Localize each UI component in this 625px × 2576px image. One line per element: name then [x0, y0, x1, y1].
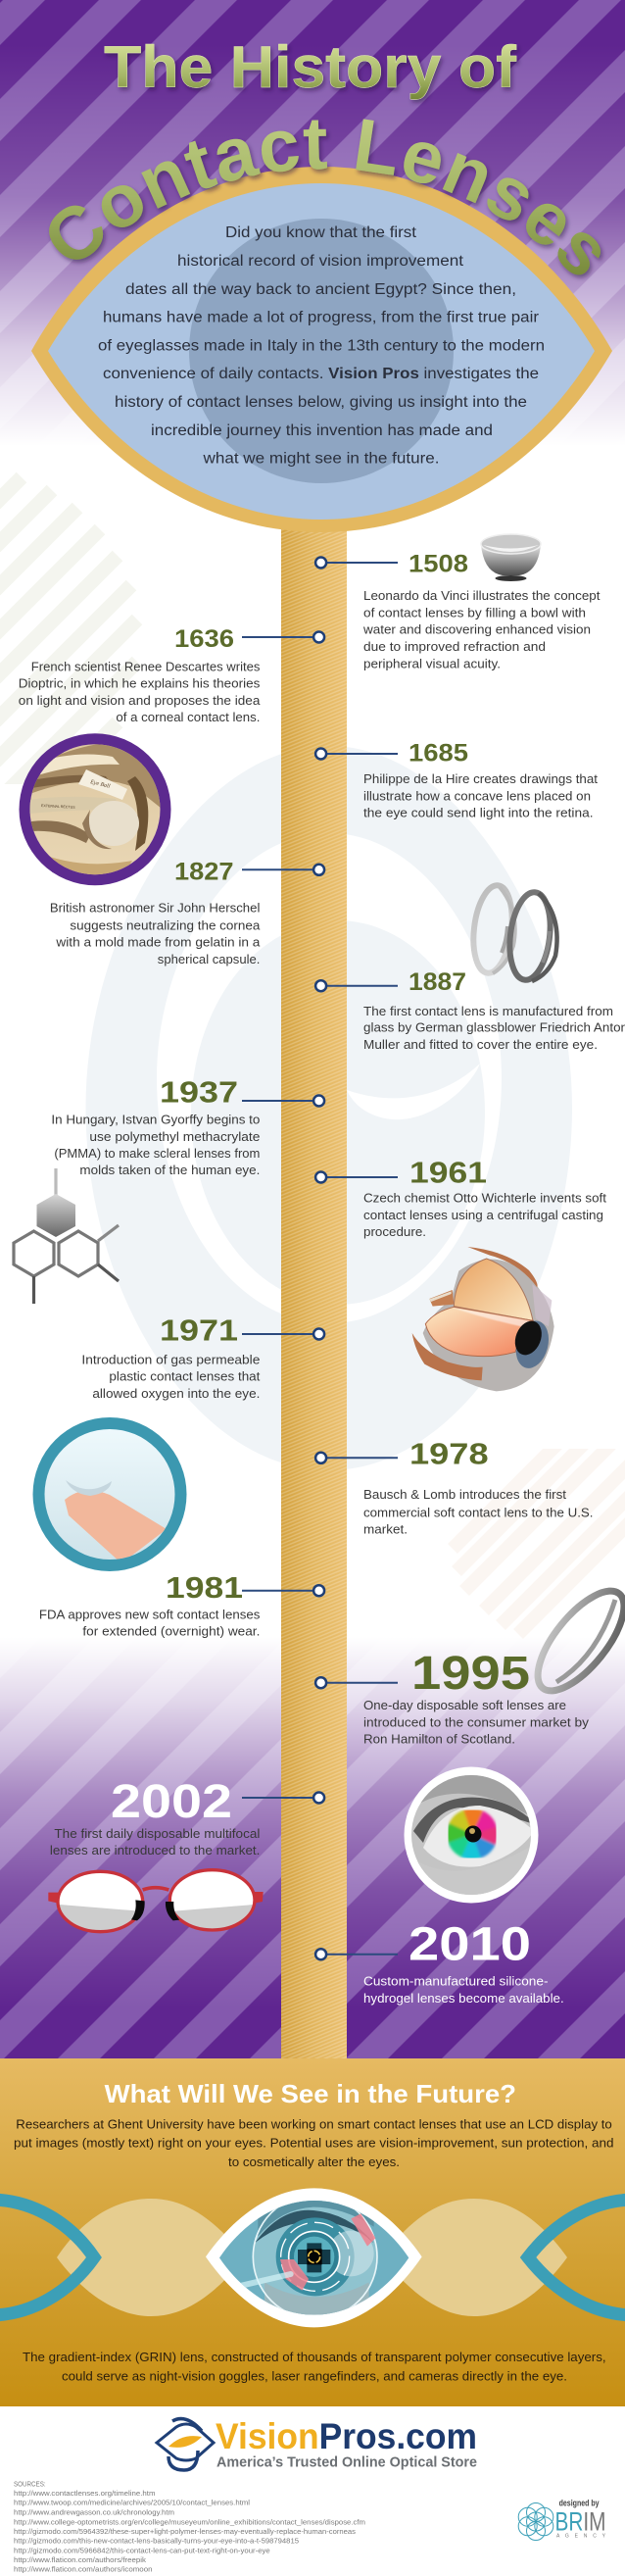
logo: VisionPros.com: VisionPros.com: [216, 2416, 477, 2456]
image: rainbow iris eye in white ring: [402, 1764, 539, 1907]
timeline vertical bar: [281, 515, 347, 2058]
logo: designed by BRIM Agency: A G E N C Y: [556, 2533, 606, 2539]
icon: single contact lens: [523, 1577, 625, 1705]
intro paragraph: dates all the way back to ancient Egypt? Since then,: [125, 281, 516, 298]
timeline item: 1937: molds taken of the human eye.: [79, 1163, 260, 1177]
timeline item: 2010: [315, 1918, 564, 2006]
timeline item: 1827: [50, 858, 324, 966]
timeline item: 1995: One-day disposable soft lenses are: [363, 1698, 566, 1712]
teal arc: right: [528, 2200, 625, 2315]
sources list: http://www.twoop.com/medicine/archives/2005/10/contact_lenses.html: [14, 2499, 250, 2507]
timeline item: 2002: 2002: [111, 1776, 232, 1828]
background: top purple striped fade: [0, 0, 625, 447]
timeline item: 2010: hydrogel lenses become available.: [363, 1991, 564, 2006]
timeline item: 2002: lenses are introduced to the market.: [50, 1843, 260, 1858]
timeline item: 1971: [81, 1313, 324, 1401]
timeline item: 2002: [50, 1776, 324, 1858]
timeline item: 1685: Philippe de la Hire creates drawings that: [363, 771, 598, 786]
logo icon: flower of life: [518, 2503, 553, 2541]
timeline item: 1827: with a mold made from gelatin in a: [55, 935, 261, 950]
decorative lens shapes: right: [382, 2199, 567, 2316]
image: eye cross-section: [412, 1247, 554, 1391]
timeline item: 1508: peripheral visual acuity.: [363, 656, 501, 670]
timeline item: 1978: [315, 1436, 594, 1536]
logo: designed by BRIM Agency: [518, 2499, 606, 2541]
future text: smart contact lenses: to cosmetically alter the eyes.: [228, 2155, 400, 2169]
icon: molecule: [14, 1168, 119, 1304]
timeline item: 1887: glass by German glassblower Friedrich Anton: [363, 1020, 625, 1035]
timeline item: 1887: The first contact lens is manufactured from: [363, 1004, 613, 1018]
timeline item: 1827: suggests neutralizing the cornea: [70, 917, 261, 932]
timeline item: 1685: 1685: [409, 740, 468, 768]
intro paragraph: Did you know that the first: [225, 224, 417, 241]
logo: VisionPros.com: [157, 2416, 477, 2471]
timeline item: 1978: market.: [363, 1521, 408, 1536]
background: faint stripes top-left: [0, 472, 142, 784]
timeline item: 1827: spherical capsule.: [158, 952, 260, 966]
icon: pair of contact lenses: [469, 883, 557, 982]
timeline item: 1981: FDA approves new soft contact lenses: [39, 1607, 261, 1621]
timeline item: 1937: 1937: [160, 1074, 238, 1109]
timeline item: 1995: [315, 1648, 590, 1746]
decorative lens shapes: left: [57, 2199, 245, 2316]
timeline item: 1971: allowed oxygen into the eye.: [92, 1386, 260, 1401]
background: faint concentric eye rings: [86, 746, 572, 1470]
intro paragraph: incredible journey this invention has made and: [151, 422, 493, 439]
title: The History of: The History of: [104, 34, 517, 100]
timeline item: 1971: plastic contact lenses that: [109, 1369, 261, 1384]
timeline item: 1636: 1636: [174, 625, 234, 653]
timeline item: 1636: on light and vision and proposes the idea: [19, 693, 261, 708]
iris circle: [189, 219, 454, 483]
timeline item: 1971: Introduction of gas permeable: [81, 1352, 260, 1366]
timeline item: 2002: The first daily disposable multifocal: [54, 1826, 261, 1841]
future text: smart contact lenses: Researchers at Ghent University have been working on smart contact lenses that use an LCD display to: [16, 2116, 612, 2131]
timeline item: 1685: illustrate how a concave lens placed on: [363, 788, 591, 803]
icon: red eyeglasses: [48, 1870, 264, 1938]
intro paragraph: history of contact lenses below, giving us insight into the: [115, 394, 527, 411]
timeline item: 1981: 1981: [166, 1570, 243, 1605]
timeline item: 1636: of a corneal contact lens.: [116, 710, 260, 724]
icon: bowl: [481, 534, 541, 581]
timeline item: 1995: Ron Hamilton of Scotland.: [363, 1731, 515, 1746]
timeline item: 1961: 1961: [409, 1156, 487, 1190]
timeline item: 1887: 1887: [409, 968, 466, 996]
gold future section background: [0, 2058, 625, 2406]
sources list: http://gizmodo.com/this-new-contact-lens-basically-turns-your-eye-into-a-t-598794815: [14, 2537, 299, 2546]
timeline item: 1978: 1978: [409, 1436, 489, 1470]
timeline item: 1961: [315, 1156, 606, 1239]
timeline item: 1961: contact lenses using a centrifugal casting: [363, 1208, 603, 1222]
future text: smart contact lenses: put images (mostly text) right on your eyes. Potential uses are vision-improvement, sun protection, and: [14, 2136, 613, 2151]
timeline item: 1685: [315, 740, 598, 819]
image: anatomical eye engraving in purple ring: EXTERNAL RECTUS: [41, 804, 75, 810]
sources list: SOURCES:: [14, 2480, 46, 2489]
timeline item: 1978: commercial soft contact lens to the U.S.: [363, 1505, 594, 1519]
timeline item: 1981: for extended (overnight) wear.: [82, 1624, 260, 1639]
sources list: http://www.college-optometrists.org/en/college/museyeum/online_exhibitions/contact_lenses/dispose.cfm: [14, 2517, 365, 2526]
future text: GRIN lens: could serve as night-vision goggles, laser rangefinders, and cameras directly in the eye.: [62, 2368, 567, 2383]
sources list: http://gizmodo.com/5964392/these-super+light-polymer-lenses-may-eventually-replace-human-corneas: [14, 2527, 356, 2536]
intro paragraph: what we might see in the future.: [202, 451, 439, 468]
sources list: http://www.contactlenses.org/timeline.htm: [14, 2489, 155, 2498]
timeline item: 1508: of contact lenses by filling a bowl with: [363, 605, 586, 619]
logo icon: eye: [157, 2419, 214, 2470]
intro paragraph: convenience of daily contacts. Vision Pros investigates the: [103, 366, 539, 382]
timeline item: 1887: Muller and fitted to cover the entire eye.: [363, 1037, 598, 1052]
heading: What Will We See in the Future?: What Will We See in the Future?: [105, 2079, 516, 2108]
sources list: http://www.andrewgasson.co.uk/chronology.htm: [14, 2507, 174, 2516]
timeline item: 1937: (PMMA) to make scleral lenses from: [54, 1146, 260, 1161]
timeline item: 1685: the eye could send light into the retina.: [363, 805, 594, 819]
intro paragraph: of eyeglasses made in Italy in the 13th century to the modern: [98, 338, 545, 355]
image: anatomical eye engraving in purple ring: [20, 733, 170, 885]
background: faint stripes bottom-right: [449, 1449, 625, 1639]
timeline item: 1995: 1995: [411, 1648, 530, 1700]
future text: GRIN lens: The gradient-index (GRIN) lens, constructed of thousands of transparent polymer consecutive layers,: [23, 2350, 606, 2364]
timeline item: 1937: [51, 1074, 324, 1177]
sources list: http://www.flaticon.com/authors/icomoon: [14, 2564, 153, 2573]
teal arc: left: [0, 2200, 94, 2315]
timeline item: 1995: introduced to the consumer market by: [363, 1714, 590, 1729]
logo: designed by BRIM Agency: BRIM: [554, 2507, 605, 2537]
timeline item: 1508: Leonardo da Vinci illustrates the concept: [363, 588, 601, 603]
timeline item: 1981: [39, 1570, 324, 1639]
timeline item: 1508: due to improved refraction and: [363, 639, 546, 654]
sources list: http://www.flaticon.com/authors/freepik: [14, 2555, 146, 2564]
timeline item: 1937: In Hungary, Istvan Gyorffy begins to: [51, 1113, 260, 1127]
timeline item: 1887: [315, 968, 625, 1052]
timeline item: 1636: Dioptric, in which he explains his theories: [19, 676, 261, 691]
logo: designed by BRIM Agency: designed by: [559, 2499, 600, 2508]
title: Contact Lenses on arc: Contact Lenses: [49, 119, 605, 280]
background: bottom purple striped fade: [0, 1637, 625, 2058]
intro paragraph: historical record of vision improvement: [177, 253, 464, 270]
timeline item: 1636: French scientist Renee Descartes writes: [31, 659, 261, 673]
timeline item: 1961: Czech chemist Otto Wichterle invents soft: [363, 1191, 606, 1206]
sources list: [14, 2480, 365, 2573]
timeline item: 1827: 1827: [174, 858, 233, 885]
timeline item: 1508: [315, 534, 601, 670]
image: contact lens on fingertip in teal ring: [33, 1417, 186, 1571]
timeline item: 2010: 2010: [409, 1918, 531, 1970]
timeline item: 1508: 1508: [409, 550, 468, 577]
logo: VisionPros.com: America’s Trusted Online Optical Store: [216, 2454, 477, 2471]
timeline item: 1937: use polymethyl methacrylate: [89, 1129, 260, 1144]
timeline item: 1971: 1971: [160, 1313, 238, 1347]
future text: smart contact lenses: [14, 2116, 613, 2169]
timeline item: 2010: Custom-manufactured silicone-: [363, 1974, 549, 1989]
future text: GRIN lens: [23, 2350, 606, 2383]
timeline item: 1978: Bausch & Lomb introduces the first: [363, 1487, 566, 1502]
eye-shaped intro panel: [31, 167, 612, 532]
intro paragraph: [98, 224, 545, 468]
image: anatomical eye engraving in purple ring: Eye Ball: [89, 779, 111, 790]
intro paragraph: humans have made a lot of progress, from the first true pair: [103, 310, 539, 325]
timeline item: 1508: water and discovering enhanced vision: [362, 622, 591, 637]
timeline item: 1961: procedure.: [363, 1224, 426, 1239]
timeline item: 1636: [19, 625, 324, 724]
timeline item: 1827: British astronomer Sir John Herschel: [50, 901, 260, 916]
sources list: http://gizmodo.com/5966842/this-contact-lens-can-put-text-right-on-your-eye: [14, 2546, 270, 2554]
image: futuristic eye with HUD: [206, 2188, 422, 2327]
